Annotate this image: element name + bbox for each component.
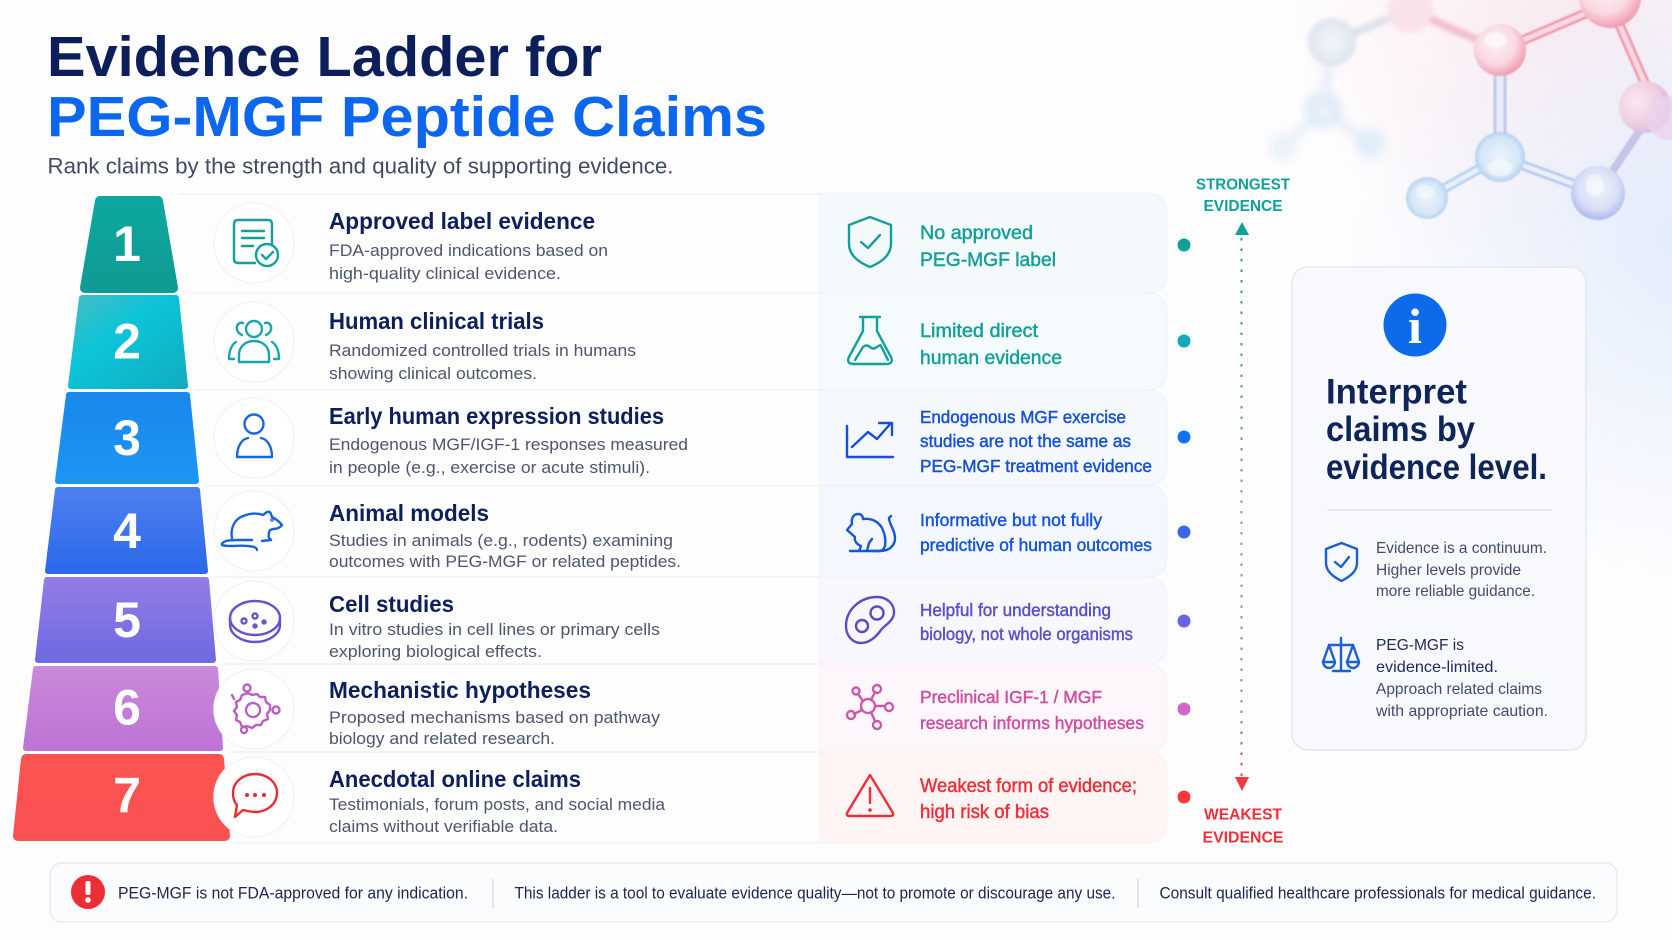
row 6 text — [329, 677, 661, 748]
row 3 text — [329, 403, 688, 477]
icon: info — [1384, 294, 1446, 356]
row 2 text — [329, 308, 636, 383]
note: evidence limited — [1375, 637, 1548, 720]
row 6 text: Mechanistic hypotheses — [329, 677, 591, 703]
status text: Preclinical IGF-1 / MGF — [920, 687, 1102, 707]
title — [47, 25, 767, 149]
panel: status 4 informative — [820, 485, 1167, 577]
step 3: 3 — [113, 410, 141, 466]
arrow: evidence strength axis — [1235, 222, 1249, 791]
note: continuum — [1376, 540, 1547, 600]
step 7: 7 — [113, 768, 141, 824]
ladder steps — [18, 201, 225, 836]
footer statement 3: Consult qualified healthcare professionals for medical guidance. — [1160, 884, 1596, 902]
row 5 text: exploring biological effects. — [329, 642, 542, 661]
row 7 text: Testimonials, forum posts, and social media — [329, 795, 666, 814]
status text — [920, 600, 1133, 644]
row 4 text: outcomes with PEG-MGF or related peptides. — [329, 552, 681, 571]
label: strongest evidence: EVIDENCE — [1204, 198, 1283, 215]
row 1 text: high-quality clinical evidence. — [329, 264, 561, 283]
status text: Weakest form of evidence; — [920, 776, 1137, 797]
row 7 text — [329, 766, 666, 836]
step 7 — [18, 759, 225, 836]
status text: Limited direct — [920, 321, 1039, 342]
icon: network — [847, 685, 893, 729]
panel heading: Interpret — [1326, 372, 1467, 412]
step 6: 6 — [113, 680, 141, 736]
icon: shield — [1326, 543, 1357, 581]
note: evidence limited: PEG-MGF is — [1376, 637, 1464, 654]
icon: sitting mouse — [847, 514, 895, 551]
title: Evidence Ladder for — [47, 25, 602, 89]
panel heading: claims by — [1326, 410, 1475, 449]
row 7 text: Anecdotal online claims — [329, 766, 581, 792]
step 1: 1 — [113, 216, 141, 272]
step 3 — [58, 395, 196, 481]
status text: predictive of human outcomes — [920, 535, 1152, 555]
panel: interpret claims — [1292, 267, 1586, 750]
row 6 text: biology and related research. — [329, 729, 555, 748]
status text — [920, 510, 1152, 555]
icon: document with check — [234, 220, 278, 266]
note: continuum: more reliable guidance. — [1376, 583, 1535, 600]
status text: biology, not whole organisms — [920, 624, 1133, 644]
icon circles column — [214, 203, 294, 837]
panel: status 3 endogenous — [820, 390, 1167, 485]
row 3 text: Early human expression studies — [329, 403, 664, 429]
row 2 text: Human clinical trials — [329, 308, 544, 334]
note: evidence limited: Approach related claims — [1376, 681, 1542, 698]
icon: scales — [1323, 638, 1359, 671]
panel: status 1 no approved label — [820, 193, 1167, 293]
status text: No approved — [920, 223, 1033, 244]
panel: status 6 preclinical — [820, 664, 1167, 752]
step 2 — [71, 298, 185, 386]
label: weakest evidence — [1202, 806, 1284, 846]
status text — [920, 776, 1137, 823]
panel: status 7 weakest — [820, 752, 1167, 843]
row 3 text: in people (e.g., exercise or acute stimuli). — [329, 458, 650, 477]
note: evidence limited: evidence-limited. — [1376, 659, 1498, 676]
level dots — [1178, 238, 1190, 804]
note: continuum: Higher levels provide — [1376, 562, 1521, 579]
status text: studies are not the same as — [920, 431, 1131, 451]
row dividers — [180, 194, 820, 843]
subtitle: Rank claims by the strength and quality of supporting evidence. — [48, 154, 674, 178]
step 4 — [48, 490, 205, 571]
icon: info: i — [1408, 298, 1422, 354]
icon: group of people — [229, 321, 279, 362]
footer disclaimer bar — [50, 863, 1617, 922]
step 5 — [38, 580, 213, 660]
label: strongest evidence — [1196, 176, 1290, 215]
icon: rodent — [222, 512, 282, 550]
title: PEG-MGF Peptide Claims — [47, 85, 767, 149]
note: evidence limited: with appropriate caution. — [1375, 703, 1548, 720]
row 5 text — [329, 591, 660, 661]
status text — [920, 687, 1144, 733]
panel heading — [1326, 372, 1547, 487]
row 5 text: In vitro studies in cell lines or primary cells — [329, 620, 660, 639]
footer statement 2: This ladder is a tool to evaluate evidence quality—not to promote or discourage any use. — [514, 884, 1116, 902]
label: weakest evidence: EVIDENCE — [1202, 830, 1284, 846]
panel heading: evidence level. — [1326, 448, 1547, 487]
molecule illustration — [1269, 0, 1672, 220]
icon: alert — [71, 875, 105, 909]
icon: line chart — [847, 423, 893, 457]
row 2 text: Randomized controlled trials in humans — [329, 341, 636, 360]
row 4 text: Animal models — [329, 500, 489, 526]
status text: high risk of bias — [920, 802, 1049, 823]
status text — [920, 223, 1056, 271]
step 4: 4 — [113, 503, 141, 559]
icon: person — [237, 414, 272, 457]
status text: PEG-MGF label — [920, 250, 1056, 271]
row 5 text: Cell studies — [329, 591, 454, 617]
status text: research informs hypotheses — [920, 713, 1144, 733]
status text: human evidence — [920, 348, 1062, 369]
icon: petri dish — [230, 601, 280, 642]
status text: Endogenous MGF exercise — [920, 407, 1126, 427]
panel: status 5 helpful — [820, 577, 1167, 664]
step 6 — [26, 669, 220, 748]
footer statement 1: PEG-MGF is not FDA-approved for any indication. — [118, 884, 468, 902]
row 1 text: FDA-approved indications based on — [329, 241, 608, 260]
icon: chat bubble — [233, 774, 277, 817]
row 2 text: showing clinical outcomes. — [329, 364, 537, 383]
status text: Informative but not fully — [920, 510, 1102, 530]
icon: cell — [846, 597, 894, 643]
row 4 text — [329, 500, 681, 571]
row 3 text: Endogenous MGF/IGF-1 responses measured — [329, 435, 688, 454]
icon: flask — [848, 317, 892, 364]
step 1 — [85, 201, 173, 288]
row 1 text: Approved label evidence — [329, 208, 595, 234]
row 6 text: Proposed mechanisms based on pathway — [329, 708, 661, 727]
status text: Helpful for understanding — [920, 600, 1111, 620]
row 4 text: Studies in animals (e.g., rodents) examining — [329, 531, 673, 550]
step 5: 5 — [113, 592, 141, 648]
panel: status 2 limited direct evidence — [820, 293, 1167, 390]
status text — [920, 407, 1152, 476]
label: strongest evidence: STRONGEST — [1196, 176, 1290, 194]
icon: warning triangle — [847, 775, 893, 816]
status text: PEG-MGF treatment evidence — [920, 456, 1152, 476]
icon: gear with nodes — [232, 684, 280, 733]
label: weakest evidence: WEAKEST — [1204, 806, 1282, 824]
row 1 text — [329, 208, 608, 283]
step 2: 2 — [113, 314, 141, 370]
icon: shield with check — [849, 217, 891, 267]
note: continuum: Evidence is a continuum. — [1376, 540, 1547, 557]
row 7 text: claims without verifiable data. — [329, 817, 558, 836]
status text — [920, 321, 1062, 369]
